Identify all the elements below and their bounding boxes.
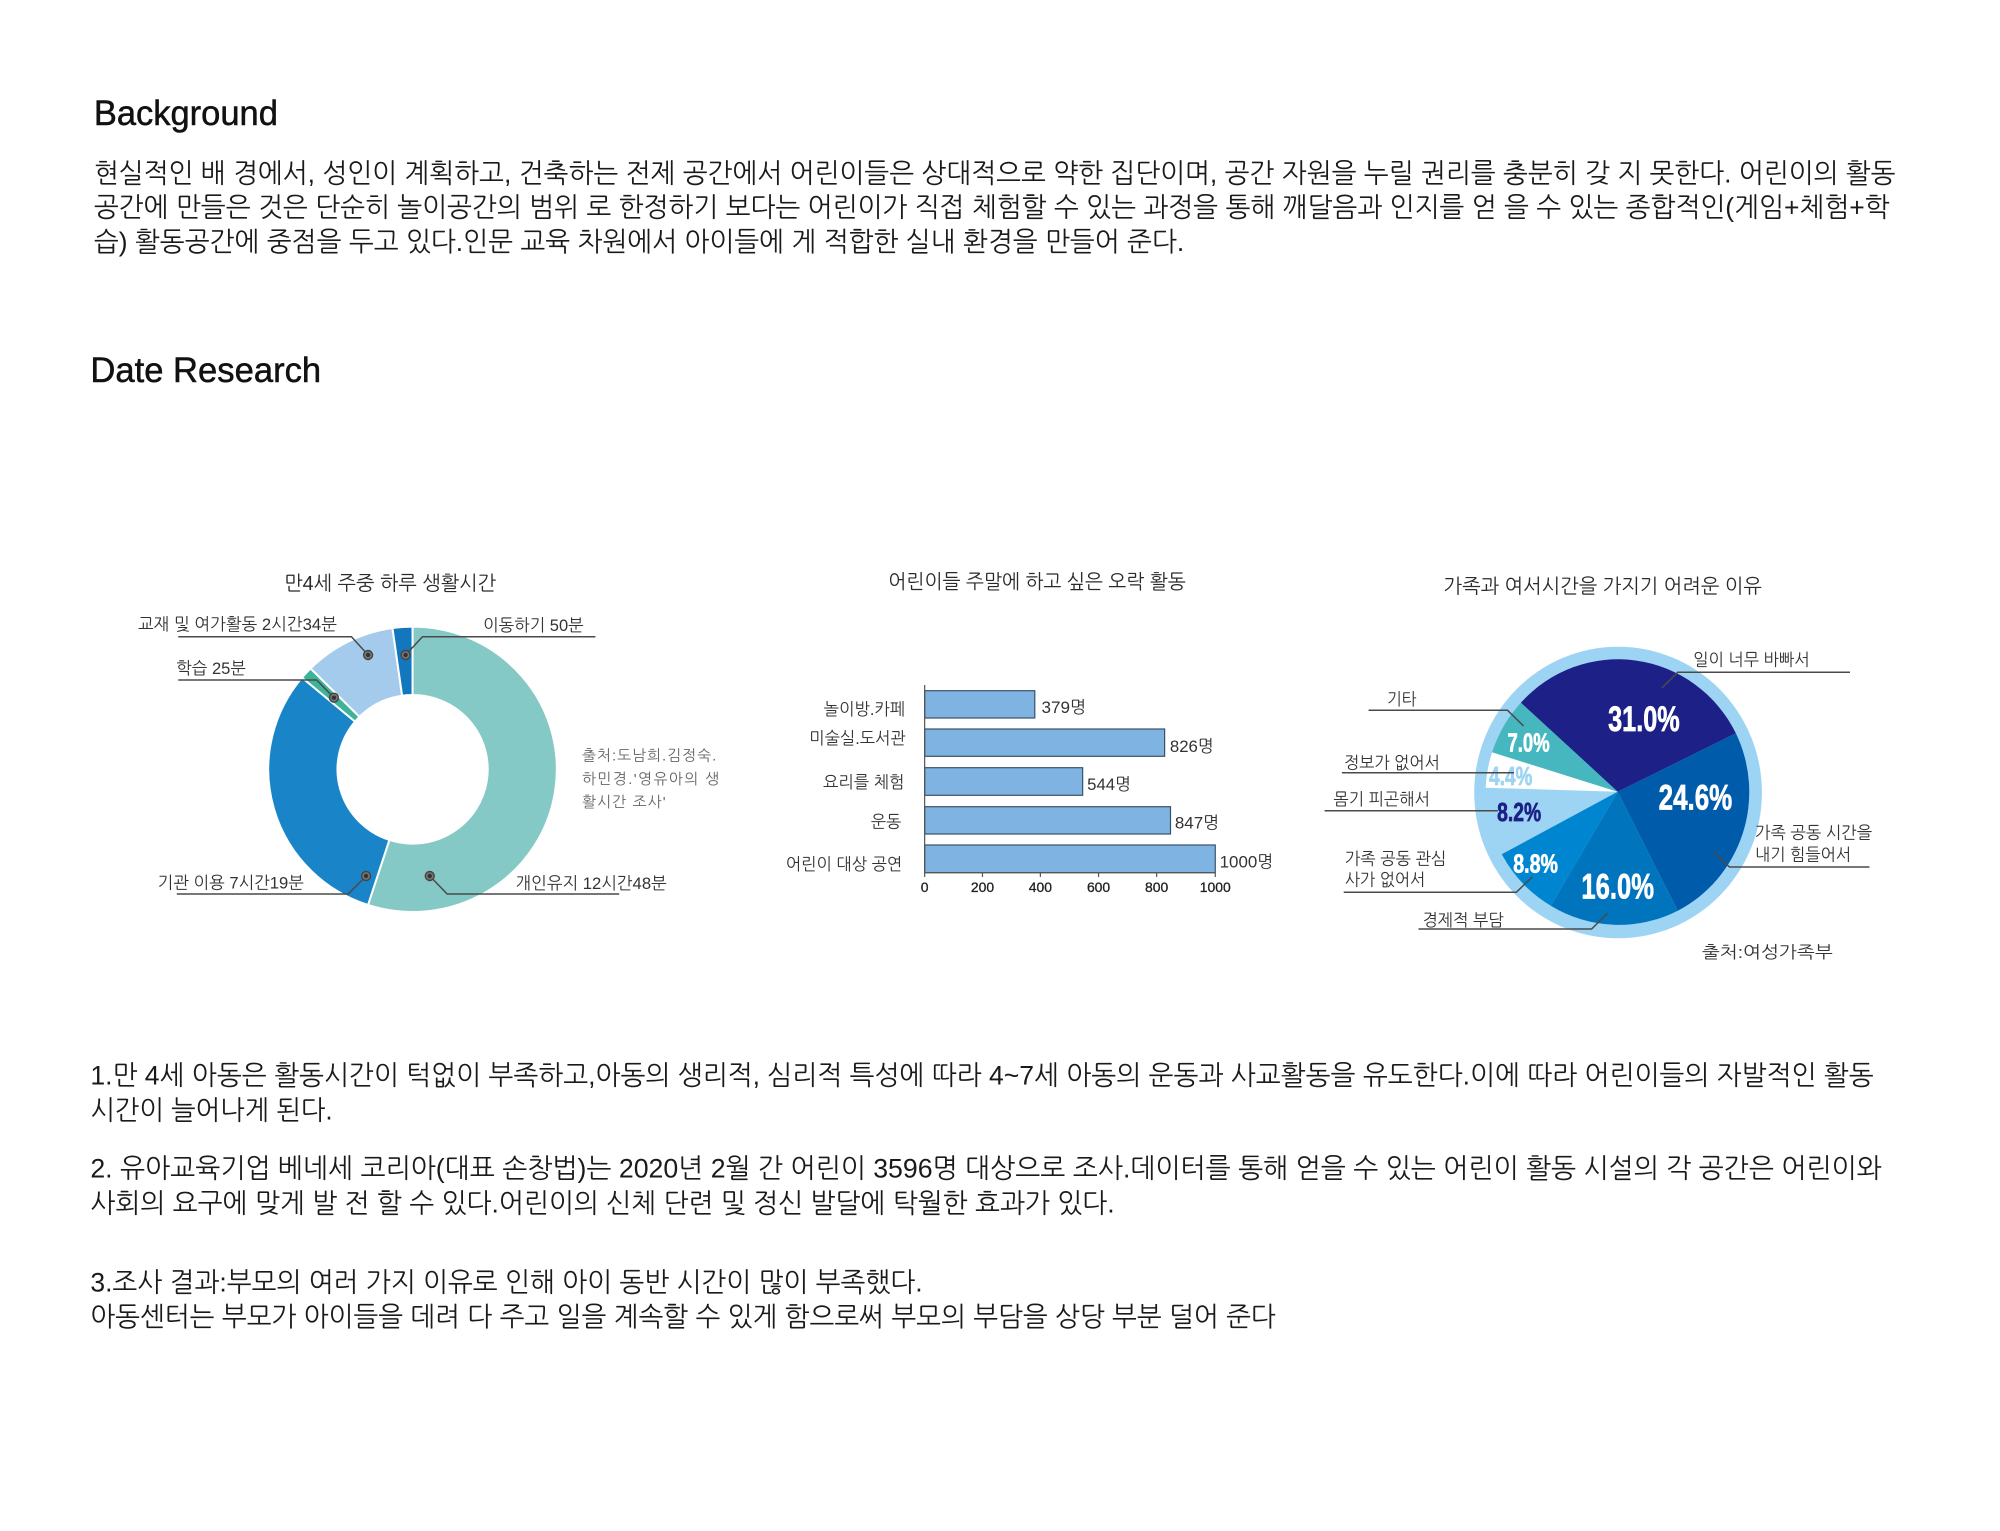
callout: hard to make family time: 내기 힘들어서	[1755, 845, 1851, 864]
category labels: 운동	[871, 813, 901, 832]
callout: hard to make family time	[1714, 824, 1872, 867]
x axis tick labels: 400	[1029, 879, 1052, 895]
callout: study materials and leisure	[138, 615, 373, 660]
percentage labels: 4.4%	[1489, 763, 1532, 791]
category labels: 놀이방.카페	[824, 700, 905, 719]
percentage labels: 7.0%	[1508, 730, 1550, 758]
x axis tick labels: 200	[971, 879, 994, 895]
value labels: 847명	[1175, 814, 1219, 833]
x axis tick labels: 1000	[1200, 879, 1231, 895]
source note: 하민경.'영유아의 생	[582, 771, 719, 788]
callout: moving: 이동하기 50분	[483, 616, 584, 635]
callout: personal maintenance: 개인유지 12시간48분	[516, 874, 667, 893]
percentage labels: 8.2%	[1497, 799, 1541, 827]
value labels: 1000명	[1220, 853, 1273, 872]
text block: finding 1: 1.만 4세 아동은 활동시간이 턱없이 부족하고,아동의 생리적, 심리적 특성에 따라 4~7세 아동의 운동과 사교활동을 유도한다.이에 따라 어린이들의 자발적인 활동	[90, 1060, 1874, 1091]
callout: economic burden: 경제적 부담	[1422, 911, 1504, 930]
callout: institution use: 기관 이용 7시간19분	[158, 874, 304, 893]
value labels: 544명	[1087, 775, 1131, 794]
axes	[925, 685, 1215, 877]
callout: too busy with work: 일이 너무 바빠서	[1693, 650, 1810, 669]
text block: finding 3	[90, 1267, 1276, 1332]
callout: institution use	[158, 872, 371, 894]
callout: moving	[401, 616, 595, 660]
callout: other	[1369, 690, 1524, 726]
text block: finding 2	[90, 1153, 1882, 1219]
x axis tick labels: 600	[1087, 879, 1110, 895]
bars	[925, 691, 1215, 873]
callout: study	[176, 659, 338, 702]
value labels: 379명	[1042, 698, 1086, 717]
category labels: 미술실.도서관	[809, 729, 906, 748]
callout: economic burden	[1418, 911, 1608, 930]
percentage labels	[1489, 700, 1732, 906]
text block: background description: 공간에 만들은 것은 단순히 놀이공간의 범위 로 한정하기 보다는 어린이가 직접 체험할 수 있는 과정을 통해 깨달음과 인지를 얻 을 수 있는 종합적인(게임+체험+학	[94, 192, 1890, 223]
panel: reasons pie chart	[1325, 576, 1872, 962]
callout: hard to make family time: 가족 공동 시간을	[1755, 824, 1872, 843]
x axis tick labels: 0	[921, 879, 929, 895]
callout: study: 학습 25분	[176, 659, 246, 678]
text block: finding 2: 2. 유아교육기업 베네세 코리아(대표 손창법)는 2020년 2월 간 어린이 3596명 대상으로 조사.데이터를 통해 얻을 수 있는 어린이 활동 시설의 각 공간은 어린이와	[90, 1153, 1882, 1184]
text block: finding 1	[90, 1060, 1874, 1125]
value labels: 826명	[1170, 737, 1214, 756]
source note: 출처:도남희.김정숙.	[582, 747, 716, 765]
x axis tick labels	[921, 879, 1231, 895]
text block: finding 3: 아동센터는 부모가 아이들을 데려 다 주고 일을 계속할 수 있게 함으로써 부모의 부담을 상당 부분 덜어 준다	[90, 1302, 1276, 1332]
heading: Date Research: Date Research	[90, 351, 321, 390]
value labels	[1042, 698, 1273, 872]
percentage labels: 24.6%	[1659, 778, 1732, 817]
callout: no shared interests: 가족 공동 관심	[1345, 849, 1446, 868]
source note: 활시간 조사'	[582, 794, 666, 811]
text block: finding 1: 시간이 늘어나게 된다.	[90, 1095, 333, 1125]
category labels: 어린이 대상 공연	[786, 855, 902, 874]
panel: weekend activity bar chart	[786, 572, 1273, 895]
callout: no shared interests	[1344, 849, 1532, 892]
callout: too busy with work	[1662, 650, 1850, 688]
callout: personal maintenance	[425, 872, 667, 894]
category labels: 요리를 체험	[823, 773, 905, 792]
pie chart	[1474, 647, 1762, 938]
callout: study materials and leisure: 교재 및 여가활동 2시간34분	[138, 615, 337, 634]
callout: lack of information: 정보가 없어서	[1344, 754, 1440, 773]
category labels	[786, 700, 906, 874]
donut chart	[268, 627, 557, 912]
text block: background description: 현실적인 배 경에서, 성인이 계획하고, 건축하는 전제 공간에서 어린이들은 상대적으로 약한 집단이며, 공간 자원을 누릴 권리를 충분히 갖 지 못한다. 어린이의 활동	[94, 159, 1896, 189]
callout: other: 기타	[1387, 690, 1417, 709]
pie chart title: 가족과 여서시간을 가지기 어려운 이유	[1444, 576, 1762, 598]
text block: background description: 습) 활동공간에 중점을 두고 있다.인문 교육 차원에서 아이들에 게 적합한 실내 환경을 만들어 준다.	[94, 227, 1184, 257]
percentage labels: 8.8%	[1513, 850, 1558, 878]
text block: finding 2: 사회의 요구에 맞게 발 전 할 수 있다.어린이의 신체 단련 및 정신 발달에 탁월한 효과가 있다.	[90, 1188, 1115, 1219]
text block: finding 3: 3.조사 결과:부모의 여러 가지 이유로 인해 아이 동반 시간이 많이 부족했다.	[90, 1267, 923, 1298]
source note	[582, 747, 719, 811]
panel: daily life time donut chart	[138, 573, 719, 912]
text block: background description	[94, 159, 1896, 257]
heading: Background: Background	[94, 94, 278, 133]
x axis tick labels: 800	[1145, 879, 1169, 895]
bar chart title: 어린이들 주말에 하고 싶은 오락 활동	[888, 572, 1186, 594]
source note: 출처:여성가족부	[1702, 943, 1833, 962]
percentage labels: 16.0%	[1581, 867, 1654, 906]
donut chart title: 만4세 주중 하루 생활시간	[284, 573, 496, 595]
callout: tired: 몸기 피곤해서	[1333, 790, 1430, 809]
callout: no shared interests: 사가 없어서	[1345, 870, 1425, 889]
percentage labels: 31.0%	[1608, 700, 1680, 739]
